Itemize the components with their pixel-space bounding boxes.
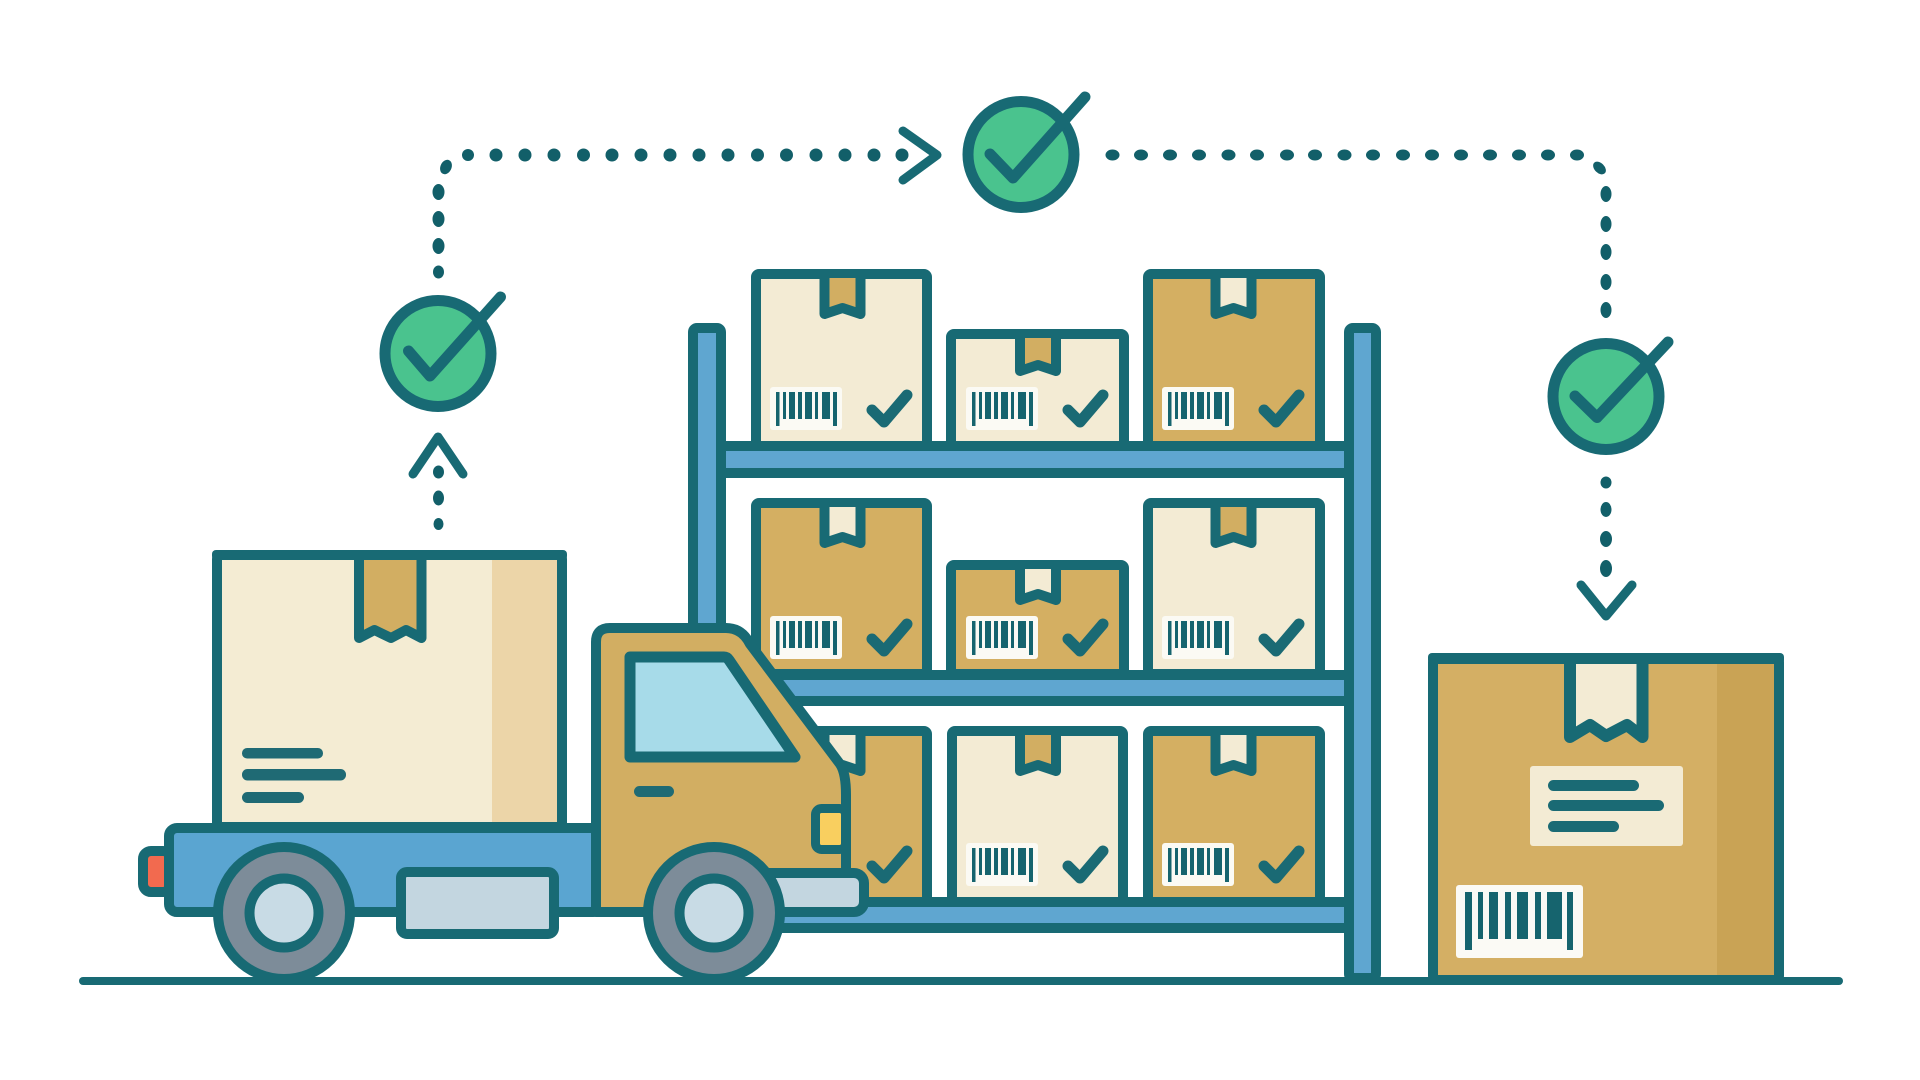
box: bottom row middle (952, 731, 1123, 902)
cab (596, 628, 846, 912)
panel: shelf boxes middle row (756, 503, 1320, 674)
barcode (1456, 885, 1583, 958)
truck (143, 550, 864, 979)
warehouse shelf unit (693, 274, 1376, 978)
check badge: third checkpoint (1553, 342, 1668, 450)
check badge: first checkpoint (385, 297, 500, 406)
check badge: second checkpoint (968, 97, 1085, 208)
parcel tape (1570, 661, 1642, 737)
box: bottom row right (1148, 731, 1320, 902)
arrow: right to second checkpoint (903, 131, 937, 180)
arrow: up to first checkpoint (413, 437, 463, 474)
parcel top edge (1428, 653, 1784, 664)
box: bottom row left (756, 731, 927, 902)
front bumper (730, 873, 864, 912)
dotted route: third checkpoint down to parcel (1581, 476, 1632, 616)
dotted route: second to third checkpoint (1106, 150, 1612, 318)
box: top row right (1148, 274, 1320, 446)
cab window (630, 657, 795, 757)
box: top row middle (951, 334, 1124, 446)
arrow: down to parcel (1581, 585, 1632, 616)
shipping label (1530, 766, 1683, 846)
side skirt panel (401, 872, 554, 934)
box: middle row middle (951, 565, 1124, 674)
door handle (634, 786, 674, 797)
headlight (816, 808, 846, 850)
shelf beams (721, 446, 1349, 928)
parcel label lines (242, 748, 346, 803)
parcel tape (359, 558, 422, 638)
box: middle row right (1148, 503, 1320, 674)
panel: shelf boxes bottom row (756, 731, 1320, 902)
large parcel on truck (212, 550, 567, 827)
front wheel (648, 847, 780, 979)
box: top row left (756, 274, 927, 446)
tail light (143, 851, 171, 892)
panel: shelf boxes top row (756, 274, 1320, 446)
box: middle row left (756, 503, 927, 674)
dotted route: truck to first checkpoint (413, 437, 463, 530)
parcel top edge (212, 550, 567, 560)
shelf uprights (693, 328, 1376, 978)
ground line (79, 977, 1843, 985)
dotted route: first to second checkpoint (432, 131, 937, 278)
rear wheel (218, 847, 350, 979)
truck flatbed (169, 828, 601, 912)
parcel delivered with label and barcode (1428, 653, 1784, 980)
